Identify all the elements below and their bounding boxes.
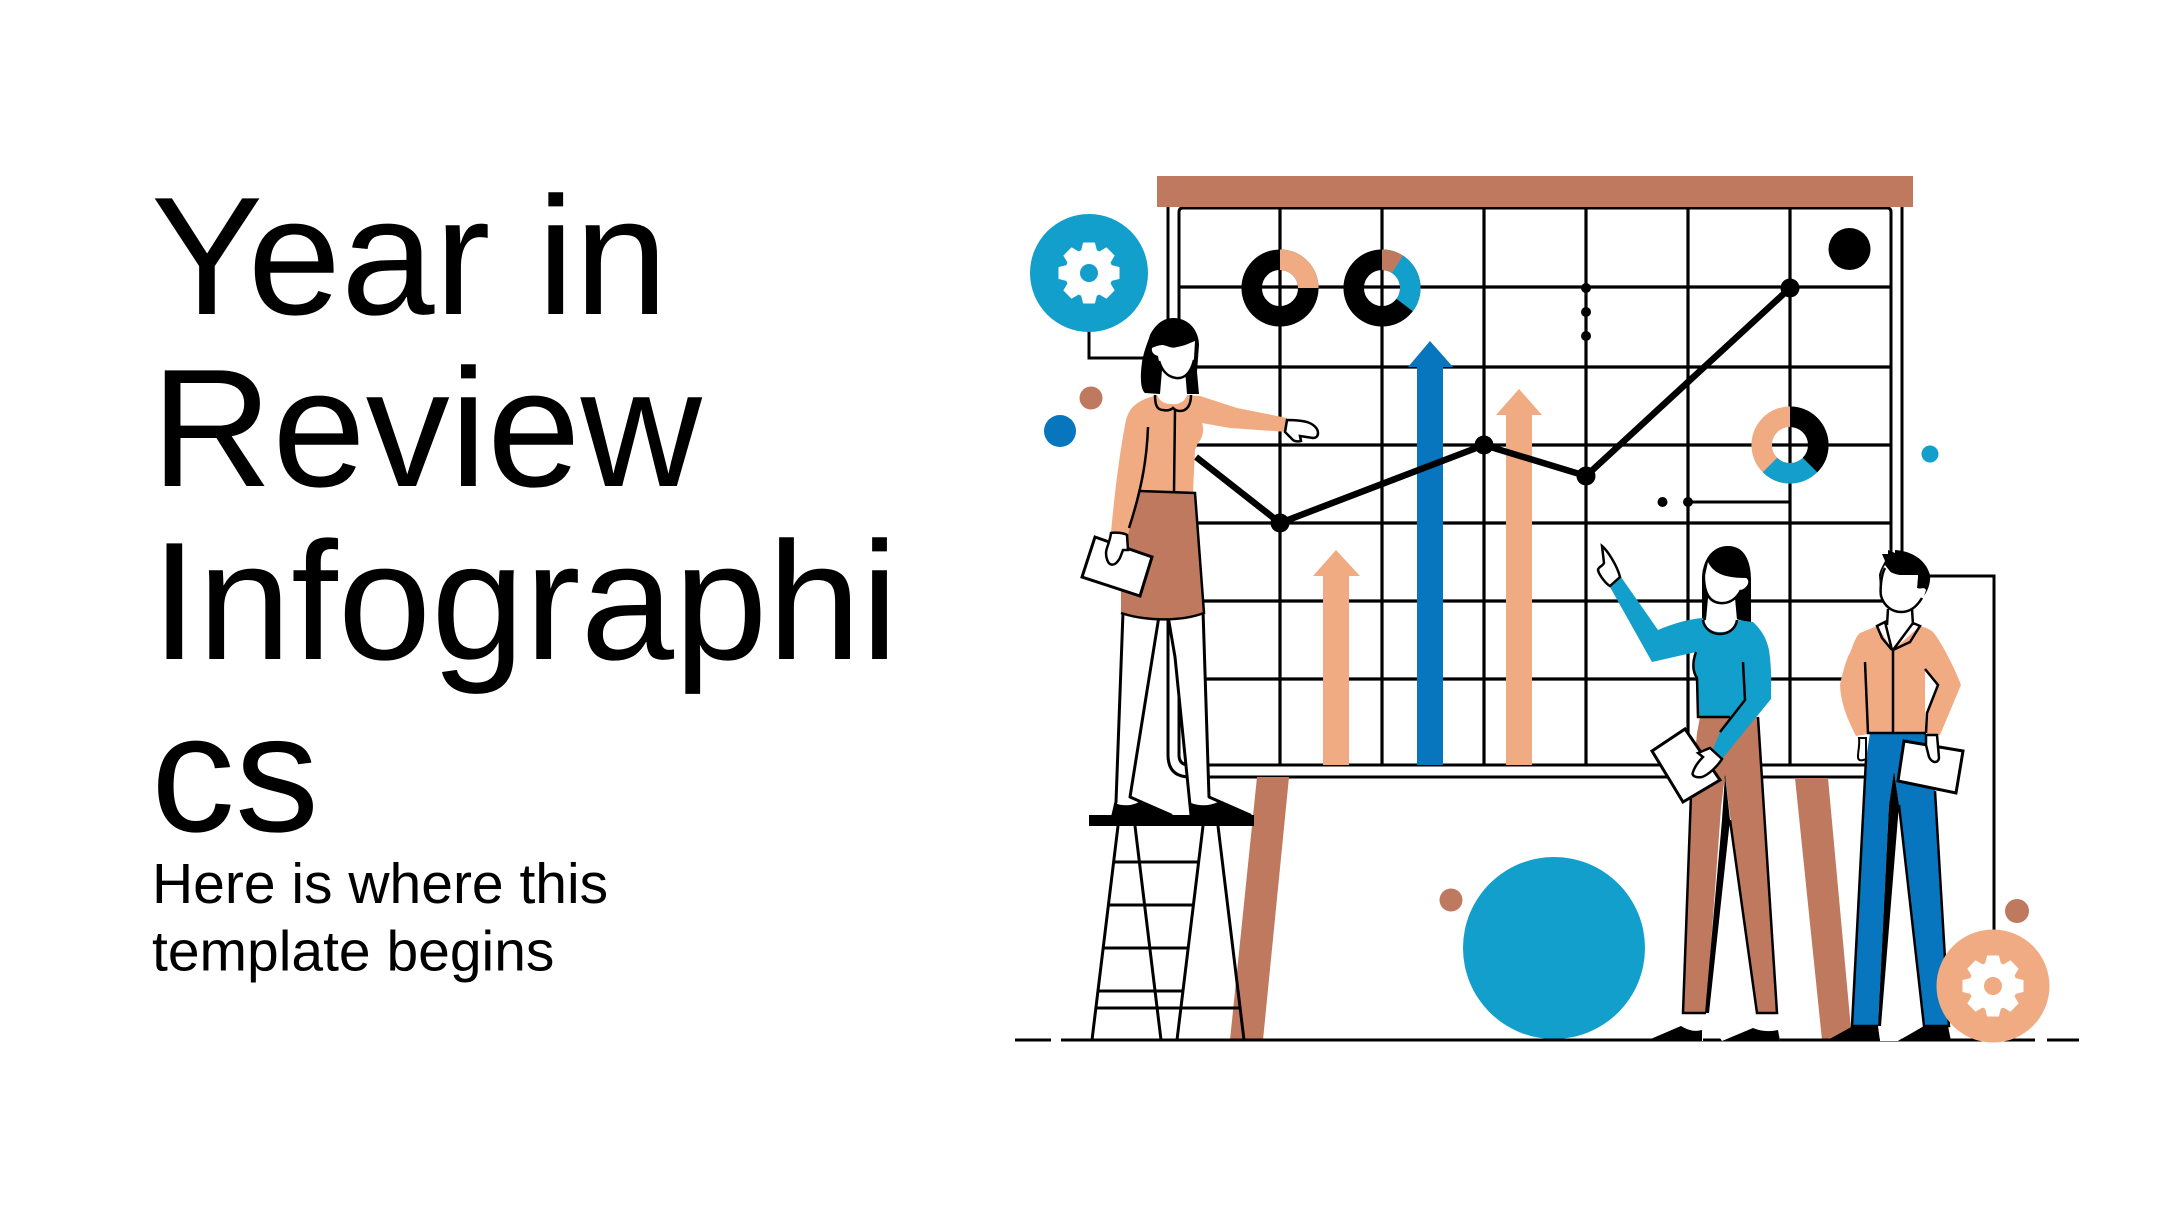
arrow: tall blue (1408, 341, 1453, 765)
board grid (1179, 208, 1891, 765)
trouser shadow (1878, 771, 1899, 1026)
donut chart 2 (1354, 260, 1410, 316)
face (1152, 341, 1195, 378)
pointing hand (1598, 546, 1620, 586)
hair (1879, 550, 1930, 602)
blue dot (1044, 415, 1076, 447)
icon: blue gear circle (1030, 214, 1148, 332)
ground line (1015, 1038, 2079, 1042)
person: woman in blue sweater (1598, 546, 1780, 1041)
table leg right (1795, 778, 1852, 1040)
horizontal dots and connector (1658, 497, 1790, 507)
white feet gap (1878, 1024, 1924, 1041)
subtitle: template begins (152, 920, 554, 984)
shoes (1826, 1026, 1951, 1041)
skirt (1121, 492, 1204, 619)
clipboard (1898, 741, 1963, 793)
board frame (1168, 207, 1902, 777)
connector lines (1089, 330, 1994, 932)
title (151, 162, 898, 867)
holding hand (1693, 748, 1722, 777)
title: Infographi (151, 507, 898, 695)
pointing hand (1285, 420, 1318, 441)
title: Review (151, 334, 703, 522)
shirt (1840, 626, 1961, 736)
subtitle (152, 852, 608, 984)
ladder (1089, 815, 1254, 1040)
donut chart 3 (1762, 417, 1818, 473)
donut chart 1 (1252, 260, 1308, 316)
large blue circle (1463, 857, 1645, 1039)
right hand (1926, 735, 1939, 762)
title: Year in (151, 162, 668, 350)
hair (1702, 546, 1751, 623)
face (1704, 562, 1748, 603)
trousers (1852, 733, 1949, 1026)
icon: peach gear circle (1936, 930, 2050, 1042)
neck (1160, 370, 1187, 406)
face (1880, 567, 1926, 612)
person: woman on ladder (1082, 318, 1318, 815)
arrow: short peach (1313, 550, 1360, 765)
sweater details (1693, 620, 1745, 732)
shoes (1646, 1026, 1780, 1041)
jacket (1111, 395, 1288, 536)
arrow: medium peach (1496, 389, 1542, 765)
neck (1887, 606, 1913, 650)
small cyan dot (1922, 446, 1938, 462)
hair (1141, 318, 1199, 394)
board top bar (1157, 176, 1913, 207)
black dot (1828, 228, 1870, 270)
shirt details (1865, 622, 1938, 733)
person: man with clipboard (1826, 550, 1963, 1041)
trousers (1113, 610, 1250, 815)
clipboard (1082, 537, 1152, 596)
sweater (1610, 577, 1771, 759)
table leg left (1230, 777, 1289, 1040)
line chart (1196, 278, 1800, 532)
vertical dots (1581, 283, 1591, 341)
holding hand (1106, 533, 1128, 565)
subtitle: Here is where this (152, 852, 608, 916)
white ankles and flares (1685, 1012, 1770, 1041)
illustration: year-in-review board with three people (1015, 176, 2079, 1042)
clipboard (1652, 729, 1720, 802)
shoes (1113, 802, 1250, 815)
trousers (1683, 717, 1777, 1013)
jacket details (1129, 395, 1191, 528)
title: cs (151, 679, 319, 867)
brown dots (1080, 386, 2029, 923)
neck (1706, 598, 1737, 632)
left hand (1858, 738, 1866, 760)
trouser shadow (1705, 775, 1730, 1013)
